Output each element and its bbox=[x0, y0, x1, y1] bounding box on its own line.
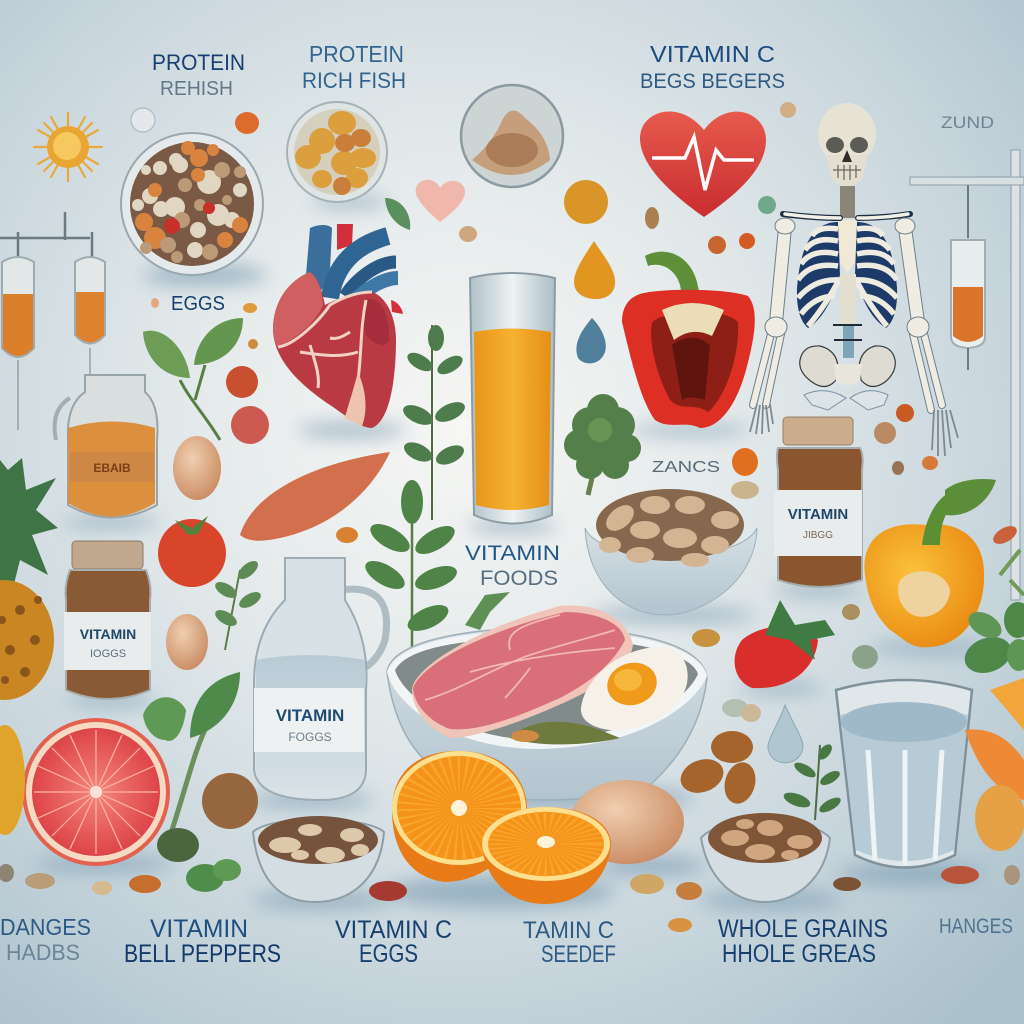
heading: protein rich fish: RICH FISH bbox=[302, 68, 406, 93]
bottom label: danges hadbs: DANGES bbox=[0, 914, 91, 940]
bowl of legumes bbox=[121, 133, 263, 275]
heading: vitamin foods: FOODS bbox=[480, 567, 558, 590]
heading: protein rehish: PROTEIN bbox=[152, 50, 245, 75]
vitamin jar left bbox=[64, 541, 151, 699]
glass bowl of nuts, bottom right bbox=[701, 813, 830, 902]
heading: vitamin foods: VITAMIN bbox=[465, 542, 560, 565]
blue arches bbox=[330, 236, 388, 298]
icon: small bubble bbox=[131, 108, 155, 132]
right lobe bbox=[362, 299, 389, 345]
spine bbox=[833, 274, 862, 358]
grapefruit bbox=[22, 718, 170, 866]
vitamin jar left: VITAMIN bbox=[80, 626, 136, 642]
bottom label: vitamin c eggs: VITAMIN C bbox=[335, 916, 452, 944]
heading: protein rich fish: PROTEIN bbox=[309, 41, 404, 67]
joints bbox=[765, 218, 929, 337]
water droplet bbox=[768, 705, 803, 763]
bottom label: whole grains: WHOLE GRAINS bbox=[718, 915, 888, 943]
bottom label: tamin c seedef: SEEDEF bbox=[541, 941, 616, 968]
leaf sprig center bbox=[400, 325, 468, 520]
water jug bbox=[254, 558, 387, 800]
heading: vitamin c: VITAMIN C bbox=[650, 41, 775, 67]
small seeds near eggs label bbox=[151, 298, 258, 349]
fat and veins bbox=[278, 292, 372, 420]
water glass bbox=[836, 680, 972, 868]
egg small bbox=[166, 614, 208, 670]
heading: protein rehish bbox=[152, 50, 245, 100]
nut on right bbox=[732, 448, 758, 476]
bottom label: danges hadbs: HADBS bbox=[6, 940, 80, 965]
sternum bbox=[838, 220, 857, 274]
blue vessel bbox=[306, 225, 332, 290]
heading: protein rich fish bbox=[302, 41, 406, 93]
small bowl of nuts, top bbox=[287, 102, 387, 202]
bottom scattered seeds bbox=[0, 864, 1020, 932]
red pepper half bbox=[622, 252, 755, 428]
basil bottom left bbox=[143, 672, 241, 892]
rib cage bbox=[797, 222, 897, 328]
heading: vitamin c: BEGS BEGERS bbox=[640, 70, 785, 93]
scattered nuts right bbox=[731, 404, 938, 499]
tomato bbox=[158, 516, 226, 587]
glass sphere bbox=[461, 85, 563, 187]
heart body bbox=[273, 272, 396, 428]
walnut bbox=[202, 773, 258, 829]
arms bbox=[753, 228, 942, 410]
vitamin jar left: IOGGS bbox=[90, 648, 126, 660]
heading: vitamin foods bbox=[465, 542, 560, 590]
bottom label: tamin c seedef: TAMIN C bbox=[523, 917, 614, 944]
bottom label: whole grains bbox=[718, 915, 888, 968]
bottom label: vitamin c eggs: EGGS bbox=[359, 940, 418, 968]
orange half bbox=[482, 807, 611, 904]
glass jar left bbox=[55, 375, 157, 518]
heading: protein rehish: REHISH bbox=[160, 78, 233, 100]
nut bowl right center bbox=[585, 489, 757, 615]
yellow pepper bbox=[864, 479, 996, 647]
amber drop bbox=[574, 241, 615, 299]
anatomical heart bbox=[273, 224, 403, 428]
bottom label: vitamin bell peppers: BELL PEPPERS bbox=[124, 940, 281, 968]
icon: sun bbox=[34, 113, 102, 181]
small golden ball bbox=[564, 180, 608, 224]
vitamin jar right bbox=[774, 417, 863, 587]
pineapple bbox=[0, 458, 58, 700]
icon: small nut bbox=[235, 112, 259, 134]
sprig left center bbox=[213, 558, 263, 650]
glass bowl of nuts, bottom left bbox=[253, 816, 384, 902]
steak bbox=[412, 605, 633, 738]
skull bbox=[818, 103, 876, 186]
red vessel bbox=[337, 224, 353, 250]
neck bbox=[840, 186, 855, 218]
egg half bbox=[581, 647, 688, 730]
egg near jar bbox=[173, 436, 221, 500]
glass jar left: EBAIB bbox=[93, 461, 131, 475]
pepper seeds bbox=[336, 527, 878, 722]
clavicle highlight bbox=[785, 214, 908, 218]
bottom label: vitamin bell peppers bbox=[124, 915, 281, 968]
icon: pale heart bbox=[416, 180, 465, 222]
skeleton bbox=[750, 103, 958, 456]
salmon slice bbox=[240, 452, 390, 541]
water jug: FOGGS bbox=[288, 730, 332, 744]
sprig center bbox=[361, 480, 460, 650]
small sprig bbox=[465, 592, 510, 630]
brown egg bbox=[570, 780, 684, 864]
icon: red heart with pulse bbox=[640, 111, 766, 217]
small seeds bbox=[459, 102, 796, 254]
label: eggs: EGGS bbox=[171, 293, 225, 315]
meat bowl bbox=[387, 605, 707, 800]
citrus and seeds far right bbox=[965, 678, 1024, 851]
bottom label: tamin c seedef bbox=[523, 917, 616, 968]
herbs far right bbox=[960, 522, 1024, 679]
label: zund: ZUND bbox=[941, 113, 994, 132]
heading: vitamin c bbox=[640, 41, 785, 93]
almonds bbox=[676, 731, 760, 807]
blue leaf bbox=[576, 318, 606, 363]
strawberry bbox=[735, 600, 835, 688]
bottom label: vitamin c eggs bbox=[335, 916, 452, 968]
atrium bbox=[273, 272, 323, 347]
bottom label: vitamin bell peppers: VITAMIN bbox=[150, 915, 248, 943]
pelvis bbox=[800, 346, 895, 410]
vitamin jar right: VITAMIN bbox=[788, 506, 848, 523]
tall juice glass bbox=[470, 273, 555, 524]
basil left bbox=[143, 318, 243, 440]
orange big bbox=[392, 751, 527, 882]
citrus far left bbox=[0, 725, 25, 835]
bottom label: whole grains: HHOLE GREAS bbox=[722, 940, 876, 968]
clavicles bbox=[783, 214, 910, 218]
red berries left bbox=[226, 366, 269, 444]
bottom label: danges hadbs bbox=[0, 914, 91, 965]
leaf sprig near top bbox=[385, 198, 410, 230]
vitamin jar right: JIBGG bbox=[803, 530, 833, 541]
iv stand left bbox=[0, 212, 105, 430]
leaf sprig bottom right bbox=[782, 742, 843, 820]
label: zancs: ZANCS bbox=[652, 459, 720, 476]
garnish bbox=[510, 722, 620, 744]
broccoli tree bbox=[564, 394, 641, 495]
hands bbox=[750, 404, 958, 456]
iv stand right bbox=[910, 150, 1024, 600]
water jug: VITAMIN bbox=[276, 706, 344, 725]
